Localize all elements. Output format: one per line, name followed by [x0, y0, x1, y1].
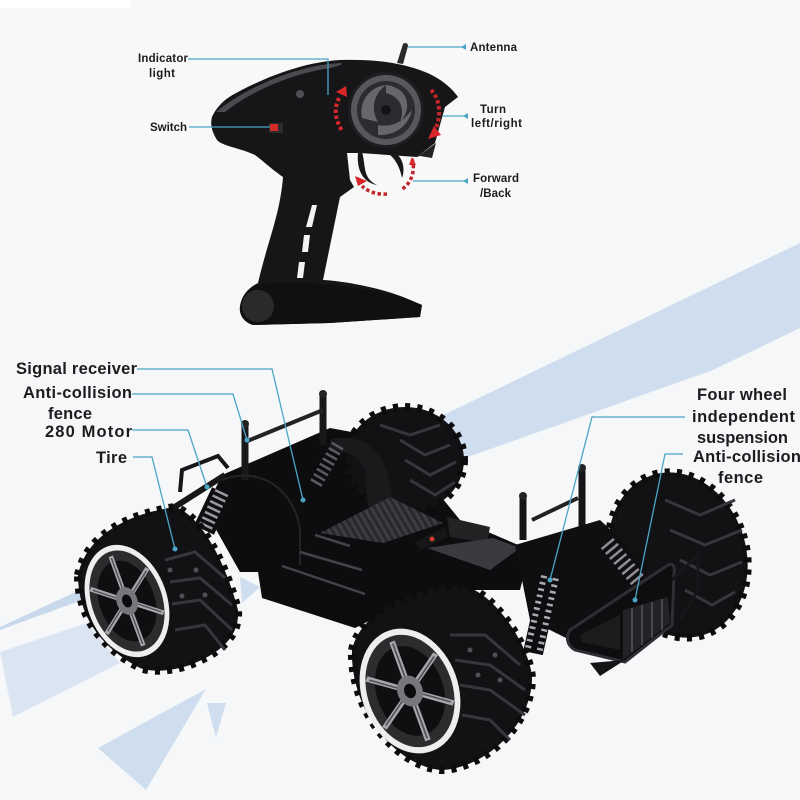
controller: [211, 43, 458, 325]
controller labels: Antenna: [470, 42, 518, 54]
controller labels: [138, 42, 522, 200]
rear arch: [330, 438, 392, 507]
triggers: [358, 152, 403, 185]
chassis main mass: [205, 428, 530, 628]
background blue bands: [0, 243, 800, 790]
car callout lines: [132, 369, 685, 602]
indicator light button: [296, 90, 304, 98]
antenna: [397, 43, 408, 64]
base plate: [240, 283, 422, 325]
car labels left: 280 Motor: [45, 423, 133, 441]
rear box: [447, 517, 490, 543]
deck lid lip: [282, 535, 365, 594]
controller body: [211, 60, 458, 325]
grey plate: [427, 538, 520, 570]
controller labels: light: [149, 68, 175, 80]
car labels right: [692, 386, 800, 487]
car labels left: Signal receiver: [16, 360, 138, 378]
front fence posts and chassis: [515, 464, 648, 640]
controller labels: Switch: [150, 122, 187, 134]
switch: [269, 123, 283, 133]
rear right tire: [587, 454, 769, 656]
controller labels: Turn: [480, 104, 506, 116]
front right shocks: [533, 543, 640, 653]
front left shock: [204, 492, 222, 530]
car labels left: Tire: [96, 449, 127, 467]
car labels right: independent: [692, 408, 796, 426]
car labels right: suspension: [697, 429, 788, 447]
car labels left: [16, 360, 138, 467]
rear left tire: [346, 407, 464, 513]
front left tire: [70, 507, 238, 671]
carbon battery deck: [320, 497, 443, 543]
front bumper: [567, 555, 698, 676]
steering wheel: [348, 72, 424, 148]
car labels right: fence: [718, 469, 763, 487]
white corner strip: [0, 0, 130, 8]
controller labels: /Back: [480, 188, 512, 200]
RC car: [70, 390, 769, 770]
controller labels: left/right: [471, 118, 522, 130]
front arch and gearbox: [222, 476, 300, 565]
car labels left: fence: [48, 405, 92, 423]
controller labels: Indicator: [138, 53, 189, 65]
rear anti-collision fence: [170, 390, 327, 510]
base hinge: [242, 290, 274, 322]
red direction arrows: [336, 86, 441, 194]
controller top highlight: [216, 63, 342, 112]
grip slots: [297, 205, 317, 278]
controller callout lines: [188, 44, 468, 184]
front right tire: [343, 585, 532, 770]
car labels right: Four wheel: [697, 386, 787, 404]
switch box with red light: [415, 527, 448, 550]
controller labels: Forward: [473, 173, 519, 185]
rear left shock: [315, 445, 338, 485]
controller backdrop panel: [0, 0, 566, 268]
car labels left: Anti-collision: [23, 384, 132, 402]
car labels right: Anti-collision: [693, 448, 800, 466]
